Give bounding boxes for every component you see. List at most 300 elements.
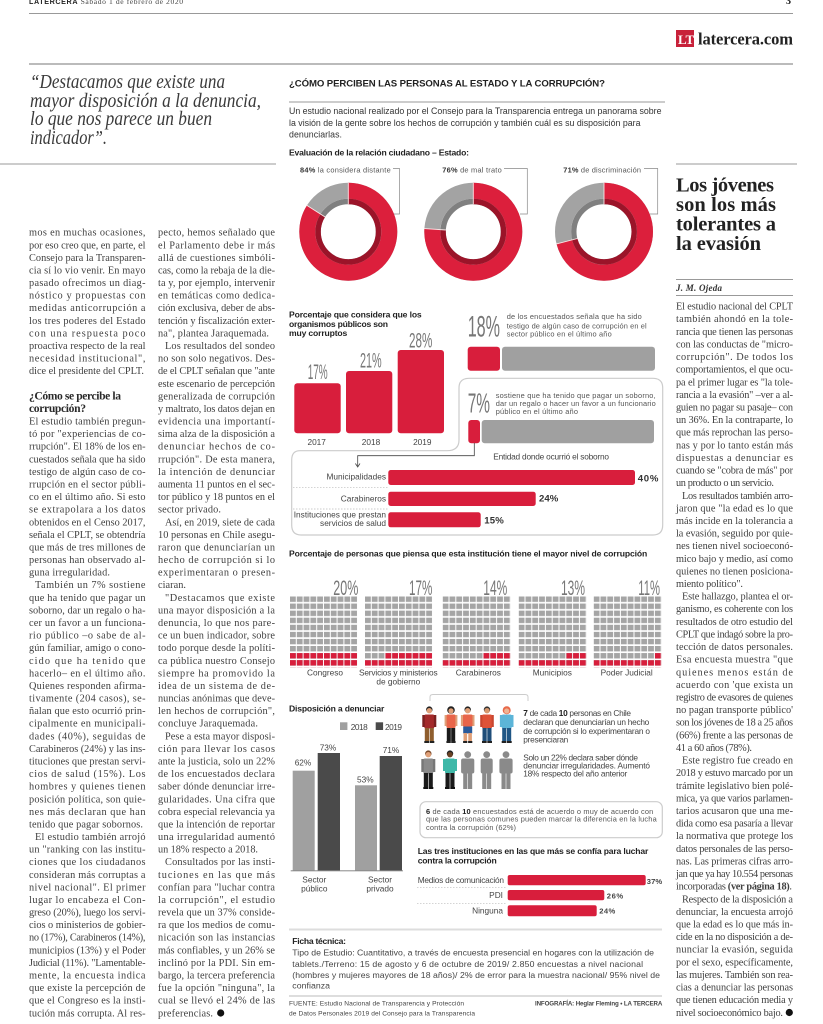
article column 2: rrupción". De esta manera, (158, 454, 275, 465)
stat: 7% soborno: público en el último año (496, 407, 578, 416)
article column 2: siempre ha promovido la (158, 668, 275, 679)
article column 1: tituciones que prestan servi- (29, 756, 146, 768)
intro text: Un estudio nacional realizado por el Consejo para la Transparencia entrega un panorama sobre (289, 106, 662, 116)
article column 1: soborno, dar un regalo o ha- (29, 605, 146, 616)
bar chart: entidad donde ocurrió el soborno: Municipalidades (326, 472, 386, 482)
article column 2: ce un buen indicador, sobre (158, 631, 275, 642)
article column 2: len hechos de corrupción", (158, 706, 275, 717)
article column 2: Así, en 2019, siete de cada (165, 517, 275, 528)
stat: 18% testigos: testigo de algún caso de corrupción en el (507, 321, 647, 330)
article column 2: cual se llevó el 24% de las (158, 996, 275, 1007)
side article text: por el sexo, específicamente, (676, 957, 793, 968)
article column 2: de los encuestados declara (158, 769, 275, 780)
side article text: la evasión, seguido por quie- (676, 529, 794, 540)
article column 2: más confiables, y un 26% se (158, 945, 275, 956)
side article text: 2018 y estuvo marcado por un (676, 768, 793, 779)
text: solo un 22%: denunciar irregularidades. Aumentó (523, 760, 650, 770)
pull quote (0, 72, 276, 165)
article column 1: El estudio también arrojó (35, 832, 146, 843)
side article text: cias a denunciar las personas (676, 982, 793, 994)
waffle chart: Carabineros 14%: 14% (483, 577, 507, 600)
article column 2: cas, como la rebaja de la die- (158, 266, 276, 276)
stat: 7% soborno: 7% (468, 388, 490, 419)
side article text (675, 302, 794, 1019)
pull quote: “Destacamos que existe una (30, 72, 225, 93)
side article text: quienes menos están de (676, 667, 793, 678)
article column 1: posición política, son quie- (29, 794, 146, 805)
article column 2: el Parlamento debe ir más (158, 240, 275, 251)
intro text (289, 106, 662, 140)
intro text: la visión de la gente sobre los hechos de corrupción y también cuál es su disposición para (289, 118, 641, 128)
donut chart: 84% distante (300, 166, 400, 273)
side article text: nes tienen nivel socioeconó- (676, 541, 794, 552)
bar chart: disposición a denunciar (289, 704, 403, 894)
article column 2: denuncia, lo que nos pare- (158, 618, 276, 629)
article column 1: se extrapolara a los datos (29, 505, 146, 516)
article column 1: tivamente (204 casos), se- (29, 694, 146, 704)
article column 1: dice el presidente del CPLT. (29, 366, 144, 377)
side article heading: Los jóvenes (676, 175, 774, 197)
article column 1: nóstico y propuestas con (29, 291, 146, 302)
donut chart: 76% mal trato (424, 166, 527, 273)
article column 1: hombres y quienes tienen (29, 782, 146, 793)
article column 2: "Destacamos que existe (165, 593, 275, 604)
text: solo un 22% (523, 753, 650, 779)
article column 2: ciaran. (158, 580, 186, 591)
article column 1: lugar lo encabeza el Con- (29, 895, 146, 906)
article column 1: Carabineros (24%) y las ins- (29, 744, 146, 755)
article column 1: dades (40%), seguidas de (29, 731, 146, 742)
article column 2: un 18% respecto a 2018. (158, 845, 258, 856)
stat: 18% testigos: de los encuestados señala que ha sido (507, 312, 642, 321)
waffle chart: Municipios 13% (519, 577, 587, 678)
article column 1: no (17%), Carabineros (14%), (29, 933, 146, 944)
icon: people 7 of 10 (421, 706, 514, 789)
bar chart: instituciones de confianza: Medios de comunicación (418, 875, 504, 885)
side article text: Este registro fue creado en (682, 756, 793, 767)
person 6 (421, 750, 435, 789)
side article text: más incide en la tolerancia a (676, 516, 793, 527)
bar chart: disposición a denunciar: 53% (357, 774, 374, 784)
article column 1: rio público –o sabe de al- (29, 631, 146, 642)
donut chart: 76% mal trato: 76% de mal trato (442, 166, 502, 175)
article column 1: guna irregularidad. (29, 568, 110, 579)
side article text: mico bajo y medio, así como (676, 554, 793, 565)
side article text: denunciar, la encuesta arrojó (676, 907, 793, 918)
side article heading: la evasión (676, 233, 762, 255)
article column 2: nuncias anónimas que deve- (158, 694, 276, 704)
article column 1: personas han observado al- (29, 555, 146, 566)
side article heading (676, 163, 797, 255)
side article text: Los resultados también arro- (682, 491, 794, 502)
article column 1: consideran más corruptas a (29, 870, 146, 881)
article column 2: na", plantea Jaraquemada. (158, 328, 269, 339)
side article text: quienes no tienen posiciona- (676, 566, 794, 577)
article column 2: Pese a esta mayor disposi- (165, 731, 276, 742)
article column 2: Consultados por las insti- (165, 857, 276, 868)
text: solo un 22%: 18% respecto del año anterior (523, 769, 628, 779)
bar chart: organismos públicos muy corruptos: 2018 (362, 437, 381, 447)
waffle chart: Poder Judicial 11% (594, 577, 662, 678)
article column 1: municipios (13%) y el Poder (29, 945, 146, 956)
article column 2: experimentaran o presen- (158, 568, 276, 579)
article column 2: la corrupción", el estudio (158, 895, 275, 906)
outlined panel (292, 378, 663, 535)
side article text: tarios acusaron que una me- (676, 806, 794, 817)
waffle chart: Servicios 17% (359, 577, 438, 686)
article column 2: tención y fiscalización exter- (158, 316, 276, 327)
subheading: cómo se percibe: corrupción? (29, 402, 86, 415)
side article heading: tolerantes a (676, 214, 776, 236)
bar chart: instituciones de confianza (417, 846, 662, 916)
article column 1: que existe la percepción de (29, 983, 146, 994)
person 9 silhouette (481, 751, 493, 789)
side article text: Esa encuesta muestra "que (676, 655, 793, 666)
side article text: cuando se "cobra de más" por (676, 466, 794, 476)
article column 1: tución más corrupta. Al res- (29, 1008, 146, 1019)
stat: 7% soborno: dar un regalo o hacer un favor a un funcionario (496, 399, 656, 408)
article column 2: ca pública nuestro Consejo (158, 656, 275, 667)
pull quote: lo que nos parece un buen (30, 109, 212, 130)
infographic title: ¿CÓMO PERCIBEN LAS PERSONAS AL ESTADO Y LA CORRUPCIÓN? (289, 78, 605, 90)
article column 1: ciones que los ciudadanos (29, 857, 146, 868)
bar chart: entidad donde ocurrió el soborno: servicios de salud (320, 518, 386, 528)
bar chart: disposición a denunciar: Sector (368, 874, 392, 884)
article column 1: mos en muchas ocasiones, (29, 228, 146, 239)
person 8 silhouette (461, 751, 474, 789)
bar chart: instituciones de confianza: Ninguna (472, 906, 503, 916)
article column 2: tor público y 18 puntos en el (158, 492, 275, 503)
bar chart: entidad donde ocurrió el soborno (293, 451, 659, 528)
waffle chart: Servicios 17%: Servicios y ministerios (359, 668, 438, 678)
article column 1: cios o ministerios de gobier- (29, 920, 146, 931)
side article text: guien no pagar su pasaje– con (676, 402, 793, 414)
bar chart: organismos públicos muy corruptos: 17% (308, 360, 328, 384)
article column 2: ta y, por ejemplo, intervenir (158, 278, 276, 289)
article column 1: obtenidos en el Censo 2017, (29, 517, 146, 528)
heading: waffle charts: Porcentaje de personas que piensa que esta institución tiene el mayor nivel de corrupción (289, 549, 647, 559)
ficha técnica: Tipo de Estudio: Cuantitativo, a través de encuesta presencial en hogares con la utilización de (292, 947, 654, 957)
bar chart: organismos públicos muy corruptos: 28% (409, 329, 432, 353)
side article text: Respecto de la disposición a (682, 894, 793, 905)
side article text: tección de datos personales. (676, 642, 793, 653)
subheading: cómo se percibe: ¿Cómo se percibe la (29, 389, 121, 402)
article column 1: medidas anticorrupción a (29, 303, 146, 314)
ficha técnica: tablets./Terreno: 15 de agosto y 6 de octubre de 2019/ 2.850 encuestas a nivel nacional (292, 959, 643, 969)
article column 2: en temáticas como dedica- (158, 291, 276, 302)
article column 1: nes más declaran que han (29, 807, 146, 818)
side article text: incorporadas (ver página 18). (676, 882, 792, 893)
bar chart: disposición a denunciar: privado (366, 884, 394, 894)
side article text: resultados de otro estudio del (676, 617, 793, 628)
article column 2: 10 personas en Chile asegu- (158, 530, 276, 541)
article column 2: evidencia una importantí- (158, 417, 276, 428)
bar chart: instituciones de confianza: 37% (647, 877, 662, 886)
source credits: INFOGRAFÍA: Heglar Fleming • LA TERCERA (535, 1000, 663, 1008)
stat: 7% soborno: sostiene que ha tenido que pagar un soborno, (496, 391, 656, 400)
side article text: nivel socioeconómico bajo. (676, 1008, 783, 1019)
text: 7 de cada 10: de corrupción si lo experimentaran o (523, 726, 650, 736)
article column 2: pecto, hemos señalado que (158, 228, 275, 239)
side article text: acuerdo con 'que exista un (676, 680, 793, 691)
waffle chart: Congreso 20%: Congreso (307, 668, 343, 678)
article column 2: Los resultados del sondeo (165, 341, 275, 352)
article column 1: El estudio también pregun- (29, 417, 146, 428)
stat: 18% testigos (468, 311, 655, 371)
bar chart: organismos públicos muy corruptos: organismos públicos son (289, 319, 388, 329)
article column 2: nicación son las instancias (158, 933, 275, 944)
article column 2: todo porque desde la políti- (158, 643, 276, 654)
waffle chart: Servicios 17%: de gobierno (376, 676, 421, 686)
text: 7 de cada 10: presenciaran (523, 735, 569, 745)
article column 2: inclinó por la PDI. Sin em- (158, 958, 276, 969)
side article text: (66%) frente a las personas de (676, 730, 793, 741)
side article text: comportamientos, el que ocu- (676, 365, 794, 376)
ficha técnica (289, 928, 662, 997)
bar chart: organismos públicos muy corruptos: 21% (360, 349, 382, 373)
side article text: dida como esa pasaría a llevar (676, 819, 794, 830)
bar chart: instituciones de confianza: PDI (489, 890, 503, 900)
side article text: cide en la no disposición a de- (676, 932, 794, 943)
text: solo un 22%: Solo un 22% declara saber dónde (523, 753, 638, 763)
article column 2: ante la justicia, solo un 22% (158, 756, 275, 768)
article column 1: un "ranking con las institu- (29, 845, 146, 856)
side article text: nas. Las primeras cifras arro- (676, 856, 794, 867)
article column 2: que la intención de reportar (158, 819, 276, 830)
waffle chart: Poder Judicial 11%: Poder Judicial (601, 668, 653, 678)
bar chart: disposición a denunciar: 62% (295, 758, 312, 768)
waffle chart: Servicios 17%: 17% (409, 577, 432, 600)
article column 1: los tres poderes del Estado (29, 316, 146, 327)
article column 1: que más de tres millones de (29, 542, 146, 554)
side article heading: son los más (676, 194, 776, 216)
side article text: que más reprochan las perso- (676, 428, 794, 439)
article column 2: concluye Jaraquemada. (158, 719, 258, 730)
ficha técnica: Ficha técnica: (292, 936, 346, 946)
article column 1: pasado ofrecimos un diag- (29, 278, 146, 289)
source credits: FUENTE: Estudio Nacional de Transparencia y Protección (289, 1000, 464, 1008)
article column 1: gún familiar, amigo o cono- (29, 643, 146, 654)
article column 1: testigo de algún caso de co- (29, 467, 146, 478)
byline: J. M. Ojeda (675, 283, 722, 293)
side article text: rancia a la evasión" –ver a al- (676, 390, 794, 401)
bar chart: organismos públicos muy corruptos: 2017 (307, 437, 326, 447)
article column 1: También un 7% sostiene (35, 580, 146, 591)
side article text: Este hallazgo, plantea el or- (682, 592, 794, 603)
bar chart: disposición a denunciar: 73% (320, 743, 337, 753)
side article text: ganismo, es coherente con los (676, 604, 793, 615)
bar chart: entidad donde ocurrió el soborno: Instituciones que prestan (294, 510, 386, 520)
bar chart: entidad donde ocurrió el soborno: 24% (539, 494, 559, 505)
article column 1: Consejo para la Transparen- (29, 253, 146, 264)
article column 2: aumenta 11 puntos en el sec- (158, 480, 276, 490)
bar chart: instituciones de confianza: 24% (599, 906, 616, 916)
article column 1: Judicial (11%). "Lamentable- (29, 958, 146, 969)
person 7 (443, 750, 457, 789)
side article text: 41 a 60 años (78%). (676, 743, 752, 754)
person 1 (422, 706, 436, 743)
bar chart: organismos públicos muy corruptos: 2019 (413, 437, 432, 447)
article column 2: bargo, la tercera preferencia (158, 970, 275, 982)
article column 2: una mayor disposición a la (158, 605, 275, 616)
subheading: cómo se percibe (29, 389, 121, 415)
side article text: registro de evasores de quienes (676, 692, 793, 704)
stat: 18% testigos: 18% (468, 311, 500, 344)
article column 1: cuestados señala que ha sido (29, 454, 146, 465)
bar chart: entidad donde ocurrió el soborno: 40% (638, 474, 659, 485)
pull quote: indicador”. (30, 128, 107, 149)
callout: 6 de cada 10 (420, 802, 662, 838)
side article text: CPLT que indagó sobre la pro- (676, 630, 794, 640)
bar chart: entidad donde ocurrió el soborno: Carabineros (341, 494, 386, 504)
bar chart: disposición a denunciar: público (301, 884, 328, 894)
article column 1: cios de salud (15%). Los (29, 769, 146, 780)
article column 2: de el CPLT señalan que "ante (158, 366, 275, 377)
bar chart: disposición a denunciar: 2019 (385, 722, 402, 732)
waffle chart: Carabineros 14% (443, 577, 511, 678)
pull quote: mayor disposición a la denuncia, (30, 91, 261, 112)
bar chart: instituciones de confianza: contra la corrupción (418, 855, 497, 865)
text: 7 de cada 10: 7 de cada 10 personas en Chile (523, 708, 631, 718)
side article text: dispuestas a denunciar es (676, 453, 793, 464)
side article text: corrupción". De todos los (676, 352, 793, 363)
person 4 (480, 706, 494, 743)
article column 1: cia sí lo vio venir. En mayo (29, 266, 146, 276)
article column 1: Quienes responden afirma- (29, 681, 146, 692)
article column 1: rrupción". El 18% de los en- (29, 442, 146, 453)
article column 2: fue la opción "ninguna", la (158, 983, 275, 994)
waffle chart: Poder Judicial 11%: 11% (638, 577, 660, 600)
article column 1: necesidad institucional", (29, 354, 146, 365)
article column 1: hacerlo– en el último año. (29, 668, 146, 679)
bar chart: organismos públicos muy corruptos (289, 309, 444, 447)
side article text: no pagan transporte público' (676, 705, 793, 716)
side article text: nunciar la evasión, seguida (676, 945, 793, 956)
side article text: con las conductas de "micro- (676, 339, 794, 350)
side article text: son los jóvenes de 18 a 25 años (676, 718, 793, 729)
bar chart: disposición a denunciar: 71% (383, 745, 400, 755)
person 3 (461, 706, 474, 743)
article column 2: una irregularidad aumentó (158, 832, 275, 843)
person 10 silhouette (499, 751, 513, 789)
source credits: de Datos Personales 2019 del Consejo para la Transparencia (289, 1010, 475, 1018)
person 2 (445, 706, 457, 743)
article column 1: mente, la encuesta indica (29, 970, 146, 982)
text: 7 de cada 10: declaran que denunciarían un hecho (523, 717, 650, 727)
bar chart: entidad donde ocurrió el soborno: Entidad donde ocurrió el soborno (493, 451, 609, 461)
page header (29, 0, 793, 64)
bar chart: disposición a denunciar: Sector (302, 874, 327, 884)
bar chart: instituciones de confianza: 26% (607, 892, 623, 900)
article column 2: generalizada de corrupción (158, 391, 275, 402)
article column 1: que el Congreso es la insti- (29, 996, 146, 1007)
byline (675, 279, 793, 296)
bar chart: disposición a denunciar: Disposición a denunciar (289, 704, 385, 714)
ficha técnica: confianza (292, 981, 330, 991)
article column 2: no son solo negativos. Des- (158, 354, 276, 365)
stat: 7% soborno (468, 388, 656, 443)
article column 1: proactiva respecto de la real (29, 341, 146, 352)
waffle chart: Municipios 13%: 13% (561, 577, 585, 600)
donut chart: 84% distante: 84% la considera distante (300, 166, 391, 175)
side article text: las mujeres. También son rea- (676, 970, 794, 981)
side article text: jaron que "la edad es lo que (675, 503, 793, 514)
arrow: soborno a entidades (355, 443, 474, 467)
article column 2: hecho de corrupción si lo (158, 555, 275, 566)
logo: latercera.com: latercera.com (698, 30, 793, 48)
side article text: jan que ya hay 10.554 personas (675, 869, 793, 880)
bar chart: entidad donde ocurrió el soborno: 15% (484, 515, 504, 526)
article column 2 (158, 228, 276, 1019)
waffle chart: Carabineros 14%: Carabineros (456, 668, 501, 678)
article column 1: co en el último año. Si esto (29, 492, 146, 503)
article column 2: sima alza de la disposición a (158, 429, 275, 440)
text: 7 de cada 10 (523, 708, 650, 745)
donut chart: 71% discriminación: 71% de discriminación (563, 166, 641, 175)
article column 1: cido que ha tenido que (29, 656, 146, 667)
article column 1: por eso creo que, en parte, el (29, 240, 146, 251)
article column 2: preferencias. (158, 1008, 213, 1019)
article column 2: sector privado. (158, 505, 221, 516)
side article text: trámite legislativo bien polé- (676, 781, 794, 792)
article column 1: con una respuesta poco (29, 328, 146, 339)
article column 1: cipalmente en municipali- (29, 719, 146, 730)
article column 2: gularidades. Una cifra que (158, 794, 275, 805)
article column 2: revela que un 37% conside- (158, 908, 276, 919)
waffle chart: Municipios 13%: Municipios (533, 668, 572, 678)
article column 2: cobra especial relevancia ya (158, 807, 275, 818)
article column 2: ción para llevar los casos (158, 744, 275, 755)
side article text: nas y por lo tanto están más (676, 440, 793, 451)
intro text: denunciarlas. (289, 130, 342, 140)
side article text: la normativa que protege los (676, 831, 793, 842)
article column 1: nivel nacional". El primer (29, 882, 146, 893)
article column 2: idea de un sistema de de- (158, 681, 276, 692)
article column 2: ra que los medios de comu- (158, 920, 276, 931)
bracket above people (430, 694, 528, 701)
article column 2: raron que denunciarían un (158, 542, 275, 554)
source credits (289, 1000, 663, 1018)
waffle chart: Congreso 20%: 20% (333, 577, 358, 600)
waffle chart: Congreso 20% (290, 577, 358, 678)
side article text: rancia que tienen las personas (676, 327, 793, 338)
article column 2: saber dónde denunciar irre- (158, 782, 276, 793)
article column 1 (29, 228, 146, 1019)
article column 2: la intención de denunciar (158, 467, 276, 478)
article column 2: allá de cuestiones simbóli- (158, 253, 276, 264)
article column 2: denunciar hechos de co- (158, 442, 276, 453)
bar chart: organismos públicos muy corruptos: muy corruptos (289, 328, 348, 338)
side article text: un producto o un servicio. (676, 478, 774, 489)
article column 2: este escenario de percepción (158, 379, 275, 390)
callout: 6 de cada 10: que las personas comunes pueden marcar la diferencia en la lucha (426, 815, 658, 824)
article column 1: greso (20%), luego los servi- (29, 908, 146, 919)
article column 2: y maltrato, los datos dejan en (158, 404, 275, 415)
stat: 18% testigos: sector público en el último año (507, 330, 612, 339)
side article text: también ahondó en la tole- (676, 314, 794, 325)
ficha técnica: (hombres y mujeres mayores de 18 años)/ 2% de error para la muestra nacional/ 95% nivel de (292, 970, 660, 980)
article column 1: señala el CPLT, se obtendría (29, 530, 146, 541)
bar chart: instituciones de confianza: Las tres instituciones en las que más se confía para luchar (418, 846, 649, 856)
side article text: pa el primer lugar es "la tole- (676, 377, 794, 388)
bar chart: organismos públicos muy corruptos: Porcentaje que considera que los (289, 309, 422, 319)
article column 1: tó por "experiencias de co- (29, 429, 146, 440)
article column 2: tuciones en las que más (158, 870, 275, 881)
article column 1: rrupción en el sector públi- (29, 480, 146, 490)
side article text: datos personales de las perso- (676, 844, 794, 855)
side article text: que tienen educación media y (676, 995, 794, 1006)
article column 1: tenido que pagar sobornos. (29, 819, 143, 830)
